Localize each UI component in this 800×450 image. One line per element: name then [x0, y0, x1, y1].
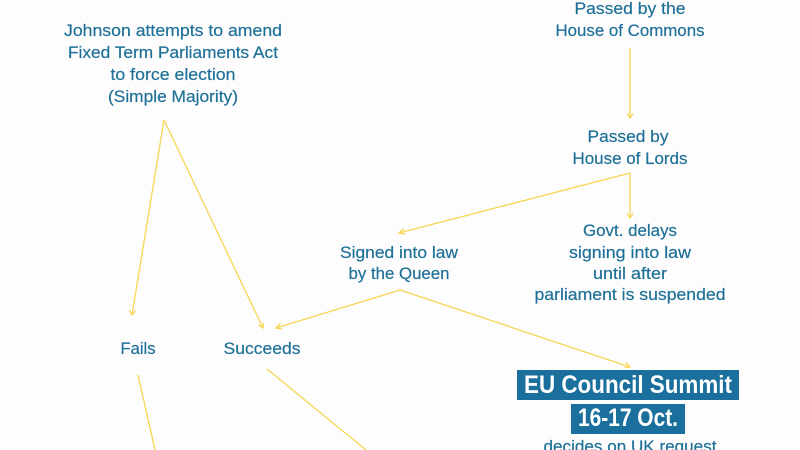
text: Govt. delays signing into law until after parliament is suspended: [534, 222, 726, 304]
arrow: Queen to EU Council Summit: [400, 290, 630, 368]
text: Fails: Fails: [120, 340, 156, 358]
heading: EU Council Summit: EU Council Summit: [524, 371, 733, 399]
text: Passed by House of Lords: Passed by: [588, 128, 669, 146]
arrow: Queen to Succeeds: [276, 290, 400, 329]
text: Signed into law by the Queen: by the Queen: [348, 265, 450, 283]
text: Passed by the House of Commons: Passed by the: [574, 0, 686, 18]
arrow: Johnson to Succeeds: [164, 120, 264, 328]
text: Johnson attempts to amend: Johnson attempts to amend: [64, 22, 282, 40]
text: Signed into law by the Queen: [340, 244, 458, 283]
arrow: Commons to Lords: [627, 48, 633, 118]
text: Passed by the House of Commons: House of Commons: [556, 22, 704, 40]
text: Signed into law by the Queen: Signed into law: [340, 244, 458, 262]
arrow: Lords to Govt delays: [627, 173, 633, 218]
text: Govt. delays signing into law until after parliament is suspended: parliament is suspended: [534, 286, 726, 304]
text: Passed by the House of Commons: [556, 0, 704, 40]
text: Johnson attempts to amend: to force election: [110, 66, 236, 84]
heading: 16-17 Oct.: 16-17 Oct.: [578, 404, 678, 432]
text: Johnson attempts to amend: [64, 22, 282, 106]
text: Passed by House of Lords: House of Lords: [572, 150, 688, 168]
text: Govt. delays signing into law until after parliament is suspended: until after: [593, 265, 668, 283]
text: Johnson attempts to amend: Fixed Term Parliaments Act: [68, 44, 278, 62]
text: Govt. delays signing into law until after parliament is suspended: Govt. delays: [583, 222, 677, 240]
arrow: Succeeds downward: [267, 369, 366, 450]
text: Passed by House of Lords: [572, 128, 688, 168]
arrow: Fails downward: [138, 375, 155, 450]
text: Govt. delays signing into law until after parliament is suspended: signing into law: [569, 244, 691, 262]
text: Succeeds: Succeeds: [224, 340, 300, 358]
arrow: Johnson to Fails: [130, 120, 164, 315]
text: Johnson attempts to amend: (Simple Majority): [108, 88, 238, 106]
arrow: Lords to Queen: [399, 173, 630, 234]
